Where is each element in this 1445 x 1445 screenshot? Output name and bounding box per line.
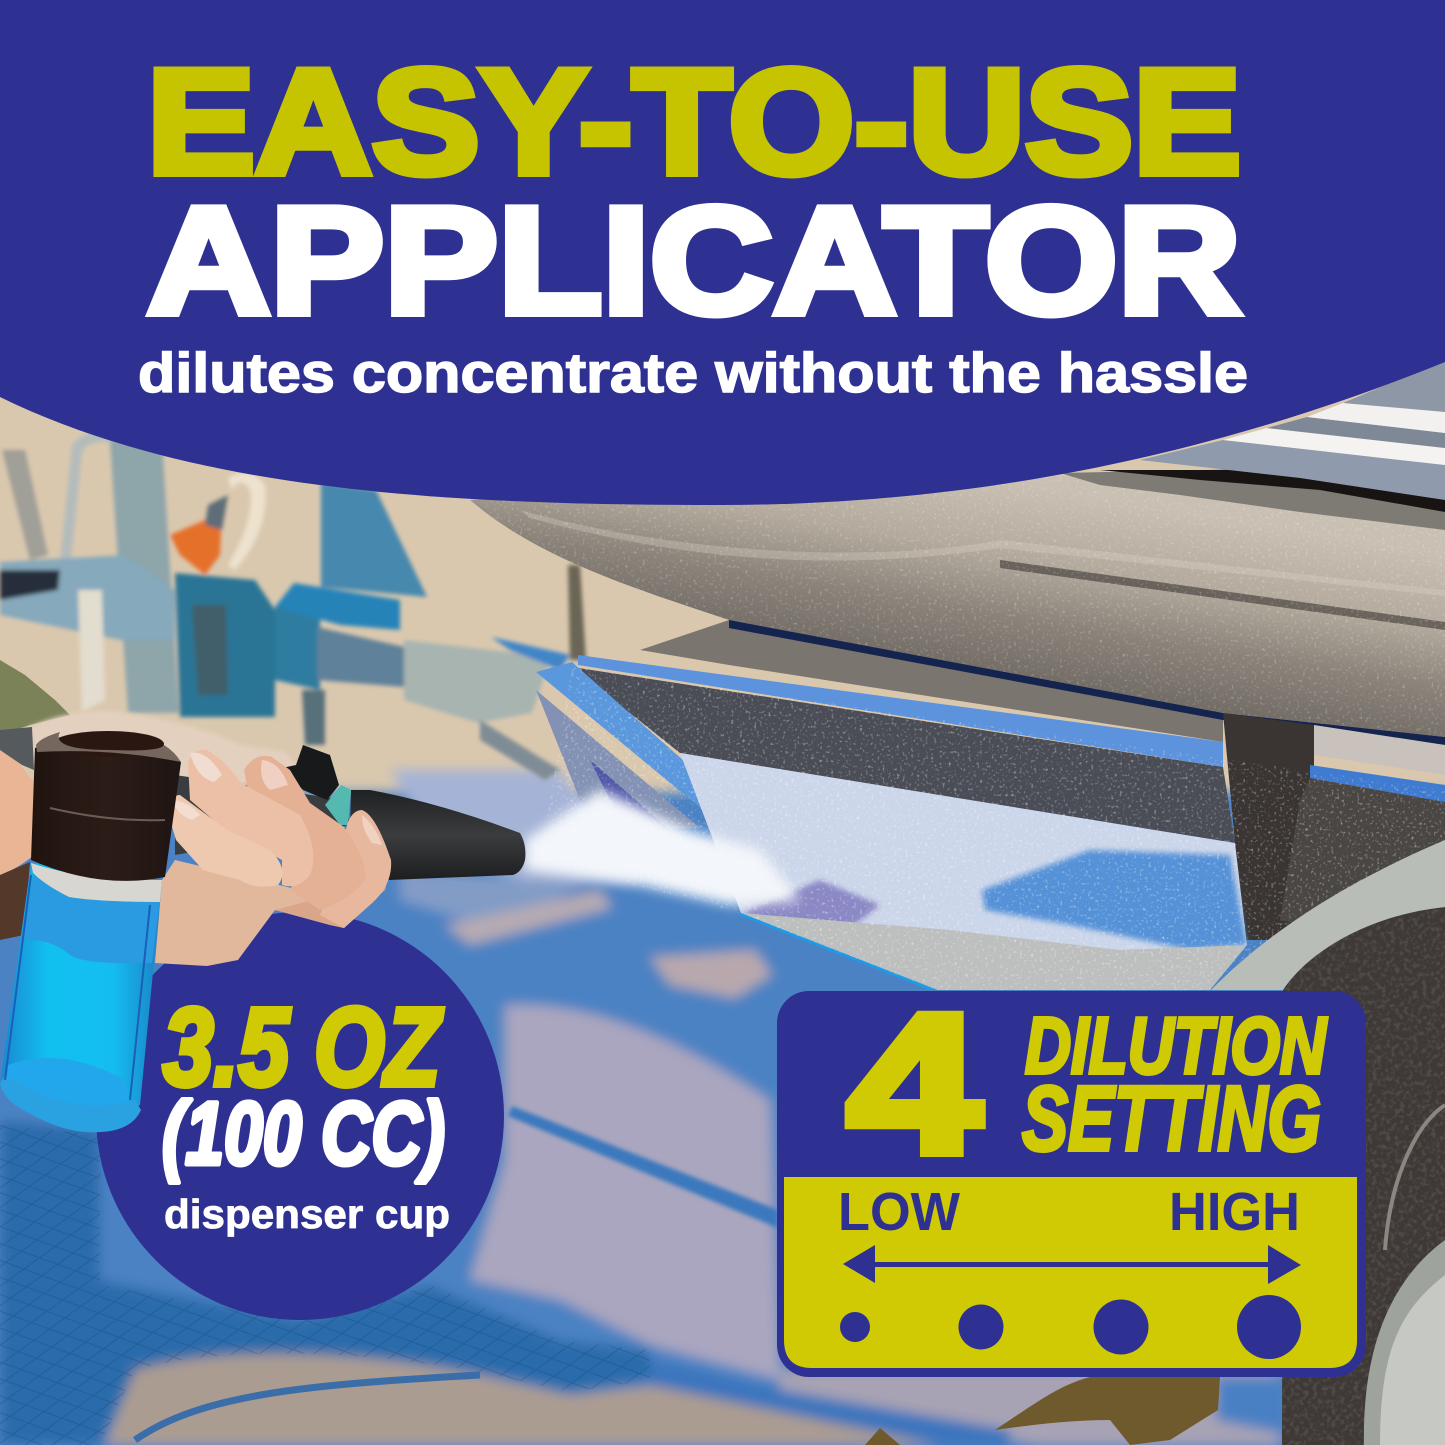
ring finger (244, 756, 365, 910)
header banner (0, 0, 1445, 505)
other hand on left (0, 745, 51, 875)
cup cap (31, 736, 181, 881)
shadow stripe on ground (508, 1106, 778, 1228)
water spray (500, 650, 1445, 995)
middle finger (188, 750, 313, 886)
sleeve (0, 660, 70, 735)
hull rails and white stripes (1140, 440, 1445, 500)
silver band (31, 863, 162, 902)
dilution heading: DILUTION (1025, 1001, 1328, 1090)
blurred trailer tongue (0, 431, 586, 780)
teal collar (325, 785, 351, 825)
big number 4: 4 (847, 973, 981, 1194)
double-headed arrow (843, 1245, 1301, 1284)
shadow under rail (1060, 465, 1445, 530)
cup body (0, 863, 162, 1116)
capacity label: dispenser cup (164, 1191, 450, 1237)
fingernails (190, 753, 222, 782)
wet ground (0, 770, 1445, 1445)
blurred forearm (30, 711, 300, 800)
index finger (167, 795, 282, 887)
hand holding applicator (0, 660, 525, 966)
dispenser cup (0, 727, 181, 1132)
setting heading: SETTING (1022, 1068, 1321, 1170)
darker upper liquid (22, 873, 160, 963)
cup base (6, 1058, 130, 1109)
scale background (784, 1177, 1357, 1368)
capacity in cc: (100 CC) (162, 1083, 445, 1183)
pinky finger (320, 810, 391, 928)
capacity value: 3.5 OZ (163, 986, 443, 1109)
high label: HIGH (1169, 1182, 1300, 1242)
sand backdrop (0, 380, 1445, 800)
fender and wheel (1211, 840, 1445, 1445)
subtitle: dilutes concentrate without the hassle (138, 341, 1248, 404)
title: applicator: APPLICATOR (147, 176, 1241, 346)
photo background: boat on trailer being washed (0, 360, 1445, 1445)
trailer frame beam (536, 620, 1445, 940)
low label: LOW (838, 1182, 960, 1242)
capacity badge (96, 912, 504, 1320)
setting dots (840, 1295, 1301, 1359)
applicator barrel (175, 775, 350, 855)
dial (282, 745, 339, 800)
seaweed on the ground (865, 1377, 1220, 1445)
boat hull (470, 360, 1445, 750)
title: easy-to-use: EASY-TO-USE (147, 38, 1241, 205)
dilution settings panel (777, 973, 1366, 1377)
palm (155, 860, 358, 966)
applicator nozzle (350, 790, 525, 880)
V brace (536, 662, 745, 820)
